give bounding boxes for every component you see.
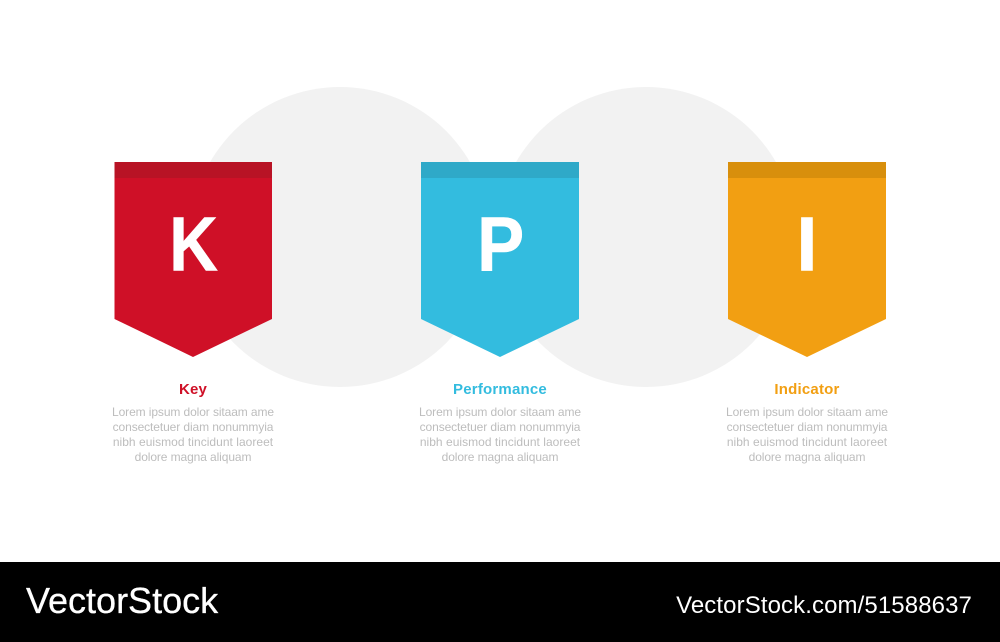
text block: Key description: [112, 405, 274, 464]
text block: Indicator description: dolore magna aliquam: [749, 450, 865, 464]
banner: K: K: [169, 202, 218, 288]
banner: I: [728, 162, 886, 357]
text block: Indicator description: [726, 405, 888, 464]
text block: Key description: dolore magna aliquam: [135, 450, 251, 464]
text block: Key description: Lorem ipsum dolor sitaam ame: [112, 405, 274, 419]
text block: Indicator description: Lorem ipsum dolor sitaam ame: [726, 405, 888, 419]
text block: Key description: nibh euismod tincidunt laoreet: [113, 435, 273, 449]
text block: Performance description: consectetuer diam nonummyia: [420, 420, 580, 434]
text block: Key description: consectetuer diam nonummyia: [113, 420, 273, 434]
heading: Performance: Performance: [453, 381, 547, 398]
text block: Performance description: dolore magna aliquam: [442, 450, 558, 464]
text block: Performance description: Lorem ipsum dolor sitaam ame: [419, 405, 581, 419]
text block: Indicator description: nibh euismod tincidunt laoreet: [727, 435, 887, 449]
banner: I: I: [796, 202, 818, 288]
circle: right background: [496, 87, 796, 387]
banner: P: P: [477, 201, 524, 287]
heading: Key: Key: [179, 381, 207, 398]
heading: Indicator: Indicator: [774, 381, 840, 398]
circle: left background: [190, 87, 490, 387]
text block: Performance description: [419, 405, 581, 464]
footer url: VectorStock.com/51588637: [676, 592, 972, 619]
banner: P: [421, 162, 579, 357]
footer bar: [0, 562, 1000, 642]
banner: K: [114, 162, 272, 357]
text block: Indicator description: consectetuer diam nonummyia: [727, 420, 887, 434]
logo text: VectorStock: [26, 580, 218, 621]
text block: Performance description: nibh euismod tincidunt laoreet: [420, 435, 580, 449]
